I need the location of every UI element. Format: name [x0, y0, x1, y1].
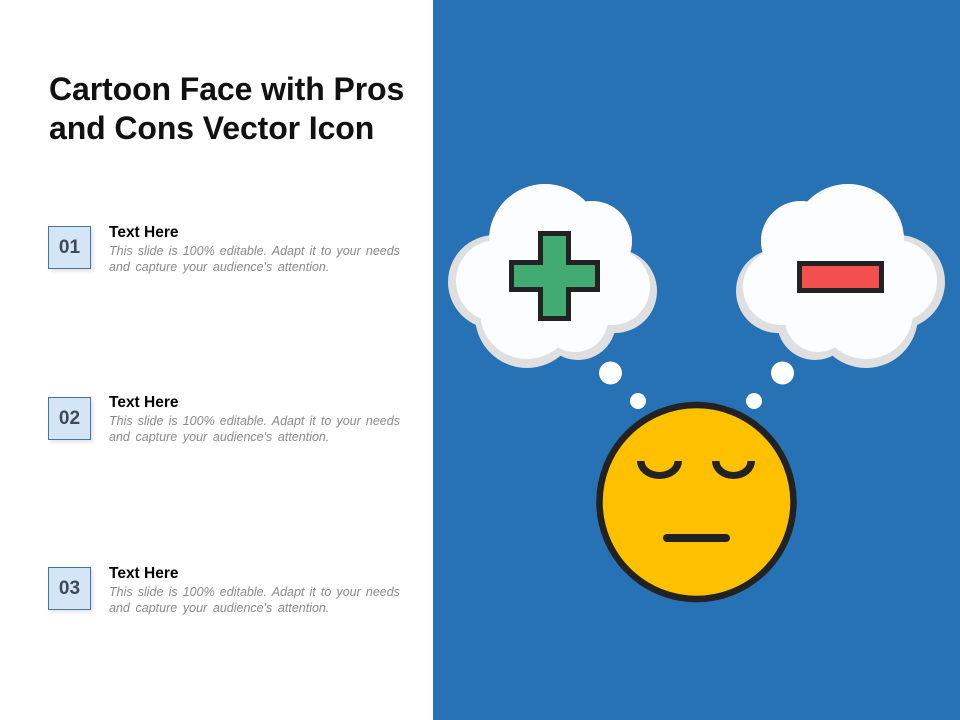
item 03 description: and capture your audience's attention.: [109, 601, 329, 615]
number badge 03: [48, 567, 91, 610]
item 01 description: and capture your audience's attention.: [109, 260, 329, 274]
list item 02: [48, 394, 400, 444]
number badge 03: 03: [59, 578, 80, 599]
item 01 description: This slide is 100% editable. Adapt it to your needs: [109, 244, 400, 258]
title: Cartoon Face with Pros: [49, 71, 404, 107]
thought cloud: pros: [448, 184, 657, 368]
number badge 02: [48, 397, 91, 440]
thought bubbles: right: [746, 362, 794, 409]
list item 01: [48, 224, 400, 274]
number badge 01: 01: [59, 237, 80, 258]
thought cloud: cons: [736, 184, 945, 368]
face circle: [600, 405, 794, 599]
item 02 description: This slide is 100% editable. Adapt it to your needs: [109, 414, 400, 428]
thought bubbles: left: [599, 362, 646, 409]
panel: blue illustration background: [433, 0, 960, 720]
mouth: [667, 534, 726, 542]
left closed eye: [637, 461, 682, 479]
item 01 heading: Text Here: [109, 224, 178, 241]
icon: plus sign: [512, 234, 598, 318]
title: and Cons Vector Icon: [49, 110, 374, 146]
item 03 heading: Text Here: [109, 565, 178, 582]
item 03 description: This slide is 100% editable. Adapt it to your needs: [109, 585, 400, 599]
item 02 description: [109, 414, 400, 444]
item 02 heading: Text Here: [109, 394, 178, 411]
item 03 description: [109, 585, 400, 615]
list item 03: [48, 565, 400, 615]
right closed eye: [712, 461, 755, 479]
title: [49, 71, 404, 146]
number badge 01: [48, 226, 91, 269]
item 01 description: [109, 244, 400, 274]
icon: minus sign: [800, 264, 882, 290]
cartoon face: [600, 405, 794, 599]
item 02 description: and capture your audience's attention.: [109, 430, 329, 444]
number badge 02: 02: [59, 408, 80, 429]
